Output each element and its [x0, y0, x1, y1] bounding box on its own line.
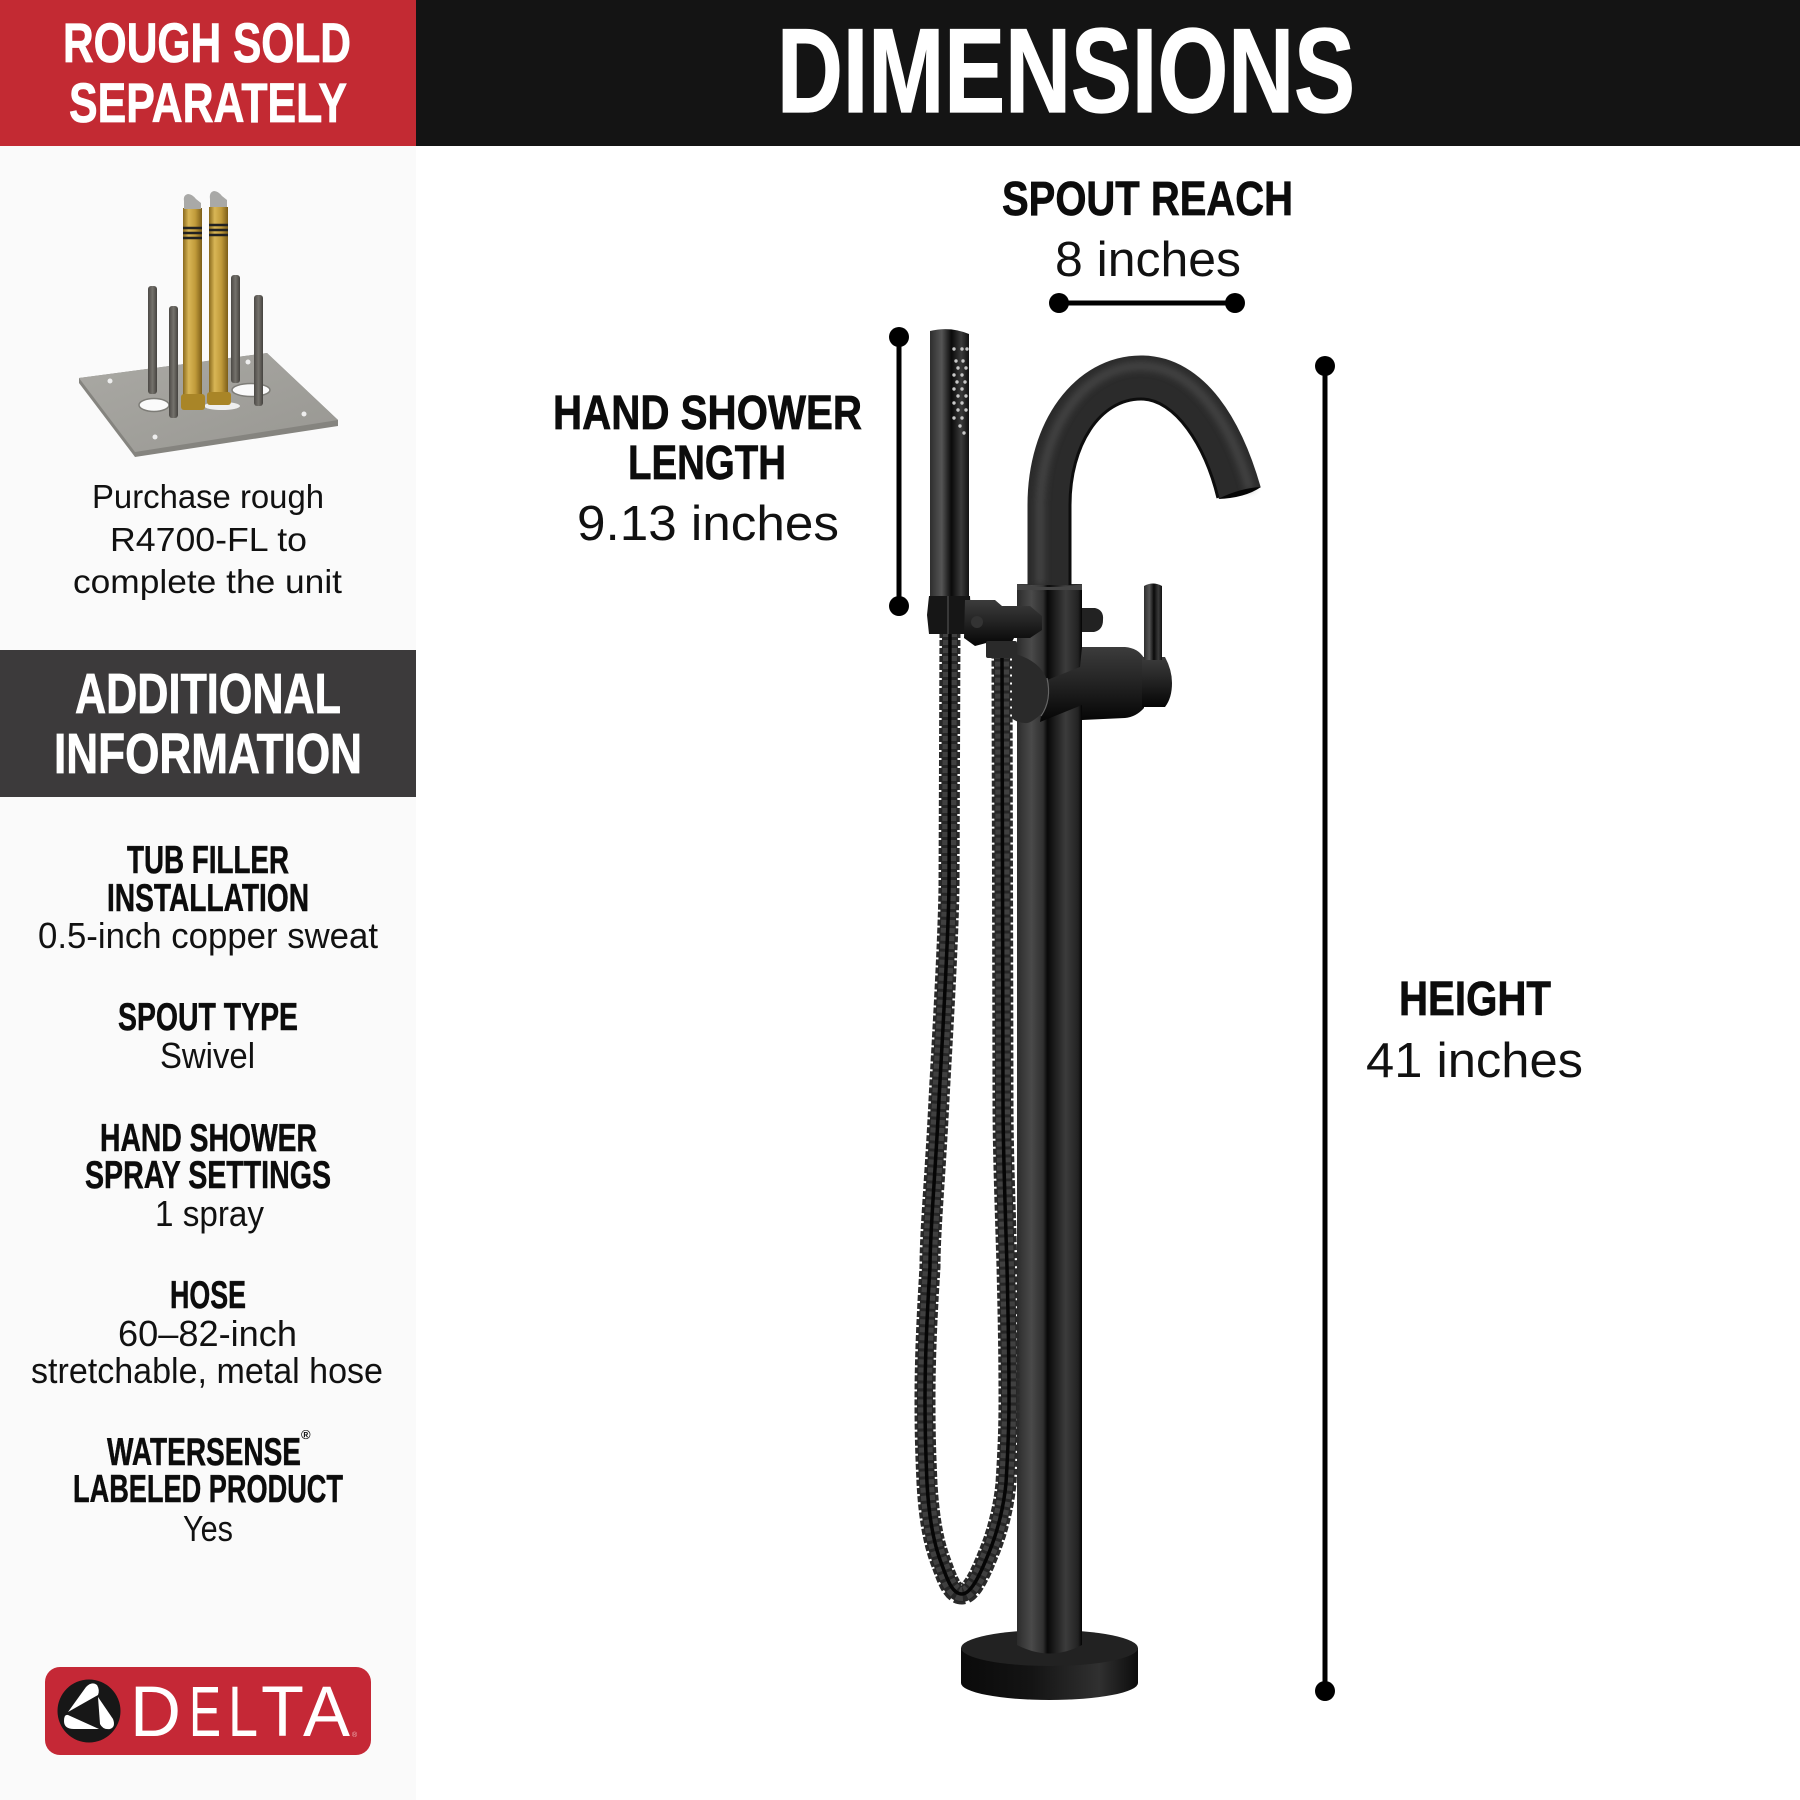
text: tub filler installation: TUB FILLER — [127, 839, 289, 882]
logo: delta: T — [261, 1673, 304, 1752]
arrow: hand shower dimension line — [889, 327, 909, 616]
text: spout type: Swivel — [160, 1035, 255, 1076]
lever — [1144, 584, 1162, 660]
banner: rough sold separately: ROUGH SOLD — [63, 11, 351, 74]
valve body — [1040, 647, 1144, 722]
heading: additional information — [0, 650, 416, 797]
text: spout type — [118, 996, 298, 1076]
holder and diverter — [927, 596, 972, 634]
heading: additional information: INFORMATION — [54, 722, 362, 786]
logo: delta — [45, 1667, 371, 1755]
banner: rough sold separately — [0, 0, 416, 146]
image: rough valve plate with brass stems — [79, 191, 338, 457]
text: tub filler installation: 0.5-inch copper sweat — [38, 915, 378, 956]
text: tub filler installation — [38, 839, 378, 956]
callout: spout reach: 8 inches — [1055, 233, 1241, 287]
arrow: spout reach dimension line — [1049, 293, 1245, 313]
text: hose: stretchable, metal hose — [31, 1350, 383, 1391]
hose — [925, 632, 1009, 1594]
panel: sidebar background — [0, 146, 416, 1800]
logo: delta: A — [303, 1673, 351, 1752]
text: hand shower spray settings — [85, 1117, 331, 1234]
text: purchase rough note — [73, 478, 342, 600]
spout — [1049, 377, 1240, 585]
callout: hand shower length: HAND SHOWER — [553, 387, 862, 440]
logo: delta: ® — [352, 1731, 358, 1739]
callout: hand shower length — [553, 327, 909, 616]
arrow: height dimension line — [1315, 356, 1335, 1701]
plate — [79, 353, 338, 457]
text: purchase rough note: Purchase rough — [92, 478, 324, 515]
hand shower — [930, 329, 969, 596]
text: spout type: SPOUT TYPE — [118, 996, 298, 1039]
text: tub filler installation: INSTALLATION — [107, 877, 309, 920]
banner: rough sold separately: SEPARATELY — [69, 71, 347, 134]
callout: height — [1315, 356, 1583, 1701]
text: watersense labeled product: Yes — [183, 1508, 233, 1549]
logo: delta: E — [189, 1673, 221, 1752]
text: hose: HOSE — [170, 1274, 246, 1317]
column — [1017, 584, 1082, 1654]
callout: height: 41 inches — [1366, 1034, 1583, 1088]
heading: additional information: ADDITIONAL — [75, 662, 341, 726]
text: hand shower spray settings: HAND SHOWER — [100, 1117, 317, 1160]
knob — [1082, 608, 1103, 632]
callout: hand shower length: 9.13 inches — [577, 497, 839, 551]
brass stems — [183, 208, 202, 403]
text: hand shower spray settings: SPRAY SETTINGS — [85, 1154, 331, 1197]
text: hose: 60–82-inch — [118, 1313, 297, 1354]
text: watersense labeled product — [73, 1427, 343, 1549]
text: purchase rough note: R4700-FL to — [110, 521, 307, 558]
text: hand shower spray settings: 1 spray — [155, 1193, 264, 1234]
callout: spout reach: SPOUT REACH — [1002, 173, 1293, 226]
text: purchase rough note: complete the unit — [73, 563, 342, 600]
text: hose — [31, 1274, 383, 1391]
base — [961, 1648, 1138, 1700]
callout: hand shower length: LENGTH — [628, 437, 786, 490]
text: watersense labeled product: WATERSENSE — [107, 1431, 301, 1474]
title: dimensions header: DIMENSIONS — [777, 4, 1355, 138]
image: freestanding tub filler faucet — [925, 329, 1261, 1700]
callout: spout reach — [1002, 173, 1293, 313]
text: watersense labeled product: ® — [301, 1427, 311, 1442]
title: dimensions header — [416, 0, 1800, 146]
text: watersense labeled product: LABELED PRODUCT — [73, 1468, 343, 1511]
callout: height: HEIGHT — [1399, 973, 1551, 1026]
logo: delta: D — [130, 1673, 181, 1752]
logo: delta: L — [228, 1673, 258, 1752]
